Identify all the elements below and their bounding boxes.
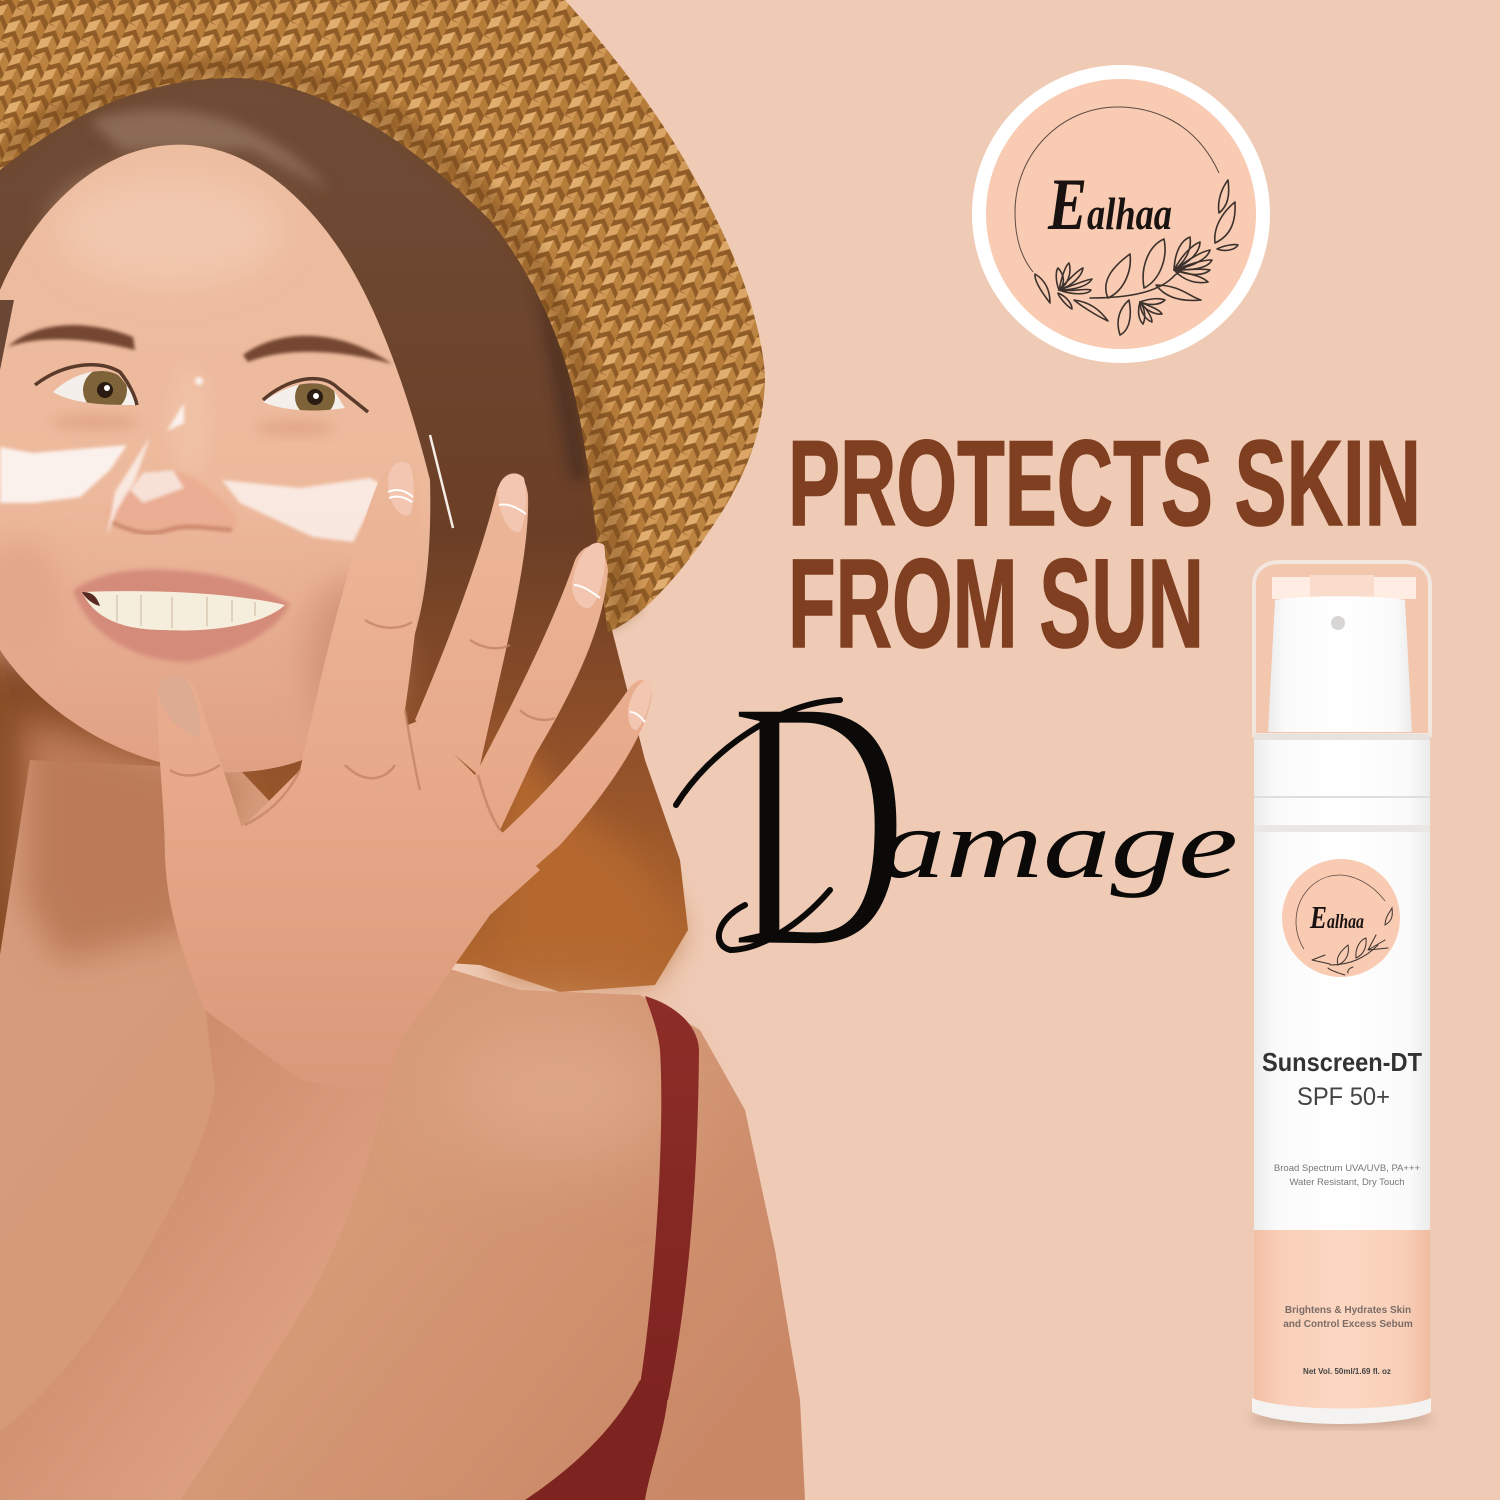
photo: woman applying sunscreen (0, 0, 805, 1500)
bottle shadow (1249, 1410, 1433, 1426)
clear cap (1254, 562, 1430, 735)
logo thin ring (1015, 107, 1219, 272)
mouth (73, 570, 290, 662)
neck shadow (25, 720, 240, 960)
hand (157, 462, 652, 1095)
nail stripes (388, 490, 645, 722)
product name: Sunscreen-DT (1262, 1047, 1422, 1077)
reflective strand in hair (430, 435, 453, 528)
middle finger (415, 474, 528, 775)
headline: FROM SUN (788, 533, 1204, 674)
hat (0, 0, 765, 632)
right eye (263, 377, 368, 417)
net volume: Net Vol. 50ml/1.69 fl. oz (1303, 1367, 1391, 1376)
nose (107, 470, 238, 533)
logo wordmark: Ealhaa (1047, 164, 1172, 246)
bottle logo: Ealhaa (1309, 899, 1364, 935)
left eye (35, 365, 137, 412)
hair strand at left temple (0, 300, 14, 370)
face (0, 145, 430, 772)
little finger (500, 680, 652, 880)
sunscreen streaks (0, 377, 382, 542)
headline (788, 415, 1421, 674)
shoulder and chest (0, 760, 805, 1500)
product benefits: Brightens & Hydrates Skin (1285, 1305, 1411, 1316)
brand logo badge (972, 65, 1270, 363)
script flourish (676, 700, 840, 950)
finger creases (170, 620, 555, 830)
script capital: D (730, 624, 908, 1023)
thumb (157, 676, 245, 860)
ring finger (475, 546, 608, 830)
index finger (300, 464, 422, 800)
logo floral branch (1035, 180, 1238, 335)
eyebrows (8, 325, 392, 364)
bottle body white (1254, 832, 1430, 1230)
product claims: Water Resistant, Dry Touch (1289, 1177, 1405, 1188)
pump head (1268, 596, 1412, 732)
script lowercase: amage (878, 791, 1238, 899)
product benefits: and Control Excess Sebum (1283, 1319, 1413, 1330)
bottle base (1252, 1398, 1431, 1424)
forearm (0, 1005, 400, 1500)
nails (158, 462, 652, 737)
product claims: Broad Spectrum UVA/UVB, PA+++ (1274, 1163, 1421, 1174)
bottle body peach (1254, 1230, 1430, 1417)
dress strap (525, 996, 699, 1500)
product claims (1274, 1163, 1421, 1188)
product: sunscreen bottle (1249, 562, 1433, 1426)
collar (1254, 734, 1430, 832)
SPF rating: SPF 50+ (1297, 1083, 1390, 1111)
hair behind the face and shoulders (0, 50, 688, 1240)
palm (165, 720, 540, 1095)
cheek and forehead shading (0, 175, 395, 740)
shoulder highlight (440, 1020, 680, 1160)
script word: Damage (676, 624, 1238, 1023)
product benefits (1283, 1305, 1413, 1330)
under-eye shading (50, 414, 335, 436)
bottle logo (1282, 859, 1400, 977)
